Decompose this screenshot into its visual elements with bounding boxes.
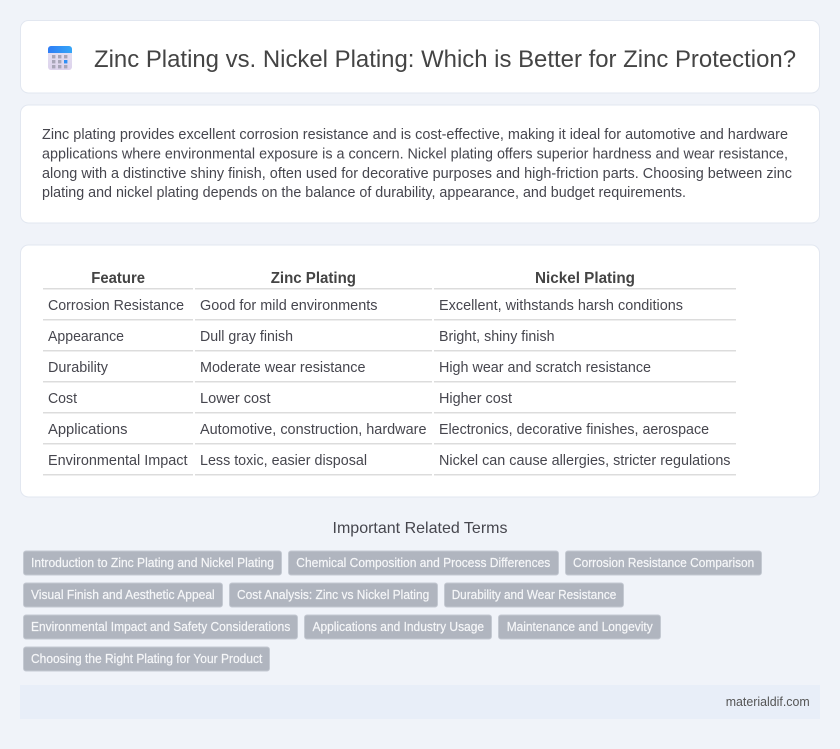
text block: summary paragraph: applications where environmental exposure is a concern. Nickel plating offers superior hardness and wear resistance, xyxy=(42,146,788,162)
tag: applications xyxy=(304,615,492,639)
table row: cost: Cost xyxy=(48,391,77,407)
text block: summary paragraph: plating and nickel plating depends on the balance of durability, appearance, and budget requirements. xyxy=(42,185,686,201)
table header: Nickel Plating xyxy=(535,270,635,287)
tag: cost analysis xyxy=(230,583,438,607)
footer bar xyxy=(20,685,820,719)
panel: comparison table card xyxy=(20,245,820,497)
table header xyxy=(43,270,736,290)
tag: maintenance xyxy=(498,615,660,639)
tag: choosing plating xyxy=(24,647,270,671)
table row: appearance: Dull gray finish xyxy=(200,329,293,345)
table row: corrosion resistance xyxy=(43,298,736,320)
text block: summary paragraph: Zinc plating provides excellent corrosion resistance and is cost-effective, making it ideal for automotive and hardware xyxy=(42,127,788,143)
heading: important related terms: Important Related Terms xyxy=(332,520,508,537)
table row: appearance: Appearance xyxy=(48,329,124,345)
table row: cost: Lower cost xyxy=(200,391,270,407)
table row: applications xyxy=(43,422,736,444)
tag: applications: Applications and Industry Usage xyxy=(312,620,484,634)
table row: durability: Moderate wear resistance xyxy=(200,360,366,376)
tag: cost analysis: Cost Analysis: Zinc vs Nickel Plating xyxy=(237,588,429,602)
tag: corrosion resistance: Corrosion Resistance Comparison xyxy=(573,556,754,570)
tag: environmental impact: Environmental Impact and Safety Considerations xyxy=(31,620,290,634)
table row: corrosion resistance: Corrosion Resistance xyxy=(48,298,184,314)
table row: durability: Durability xyxy=(48,360,109,376)
table row: applications: Automotive, construction, hardware xyxy=(200,422,426,438)
table header: Feature xyxy=(91,270,145,287)
table row: appearance xyxy=(43,329,736,352)
table row: environmental impact xyxy=(43,453,736,476)
table row: environmental impact: Nickel can cause allergies, stricter regulations xyxy=(439,453,730,469)
table row: durability xyxy=(43,360,736,382)
tag: durability: Durability and Wear Resistance xyxy=(452,588,616,602)
tag: choosing plating: Choosing the Right Plating for Your Product xyxy=(31,652,263,666)
tag: corrosion resistance xyxy=(566,551,762,575)
table row: applications: Electronics, decorative finishes, aerospace xyxy=(439,422,709,438)
table header: Zinc Plating xyxy=(271,270,356,287)
tag list: related terms xyxy=(24,551,762,671)
tag: chemical composition xyxy=(288,551,558,575)
footer source text: materialdif.com xyxy=(726,694,810,709)
tag: chemical composition: Chemical Composition and Process Differences xyxy=(296,556,550,570)
table row: corrosion resistance: Excellent, withstands harsh conditions xyxy=(439,298,683,314)
text block: summary paragraph: along with a distinctive shiny finish, often used for decorative purposes and high-friction parts. Choosing between zinc xyxy=(42,166,792,182)
panel: summary text card xyxy=(20,105,820,223)
table row: cost: Higher cost xyxy=(439,391,512,407)
table row: cost xyxy=(43,391,736,414)
table row: applications: Applications xyxy=(48,422,128,438)
tag: introduction xyxy=(24,551,282,575)
tag: durability xyxy=(444,583,624,607)
panel: title card xyxy=(20,20,820,93)
text block: summary paragraph xyxy=(42,127,792,201)
table row: corrosion resistance: Good for mild environments xyxy=(200,298,378,314)
tag: visual finish xyxy=(24,583,222,607)
table row: environmental impact: Environmental Impact xyxy=(48,453,188,469)
table row: environmental impact: Less toxic, easier disposal xyxy=(200,453,367,469)
table row: appearance: Bright, shiny finish xyxy=(439,329,554,345)
tag: visual finish: Visual Finish and Aesthetic Appeal xyxy=(31,588,215,602)
tag: introduction: Introduction to Zinc Plating and Nickel Plating xyxy=(31,556,274,570)
tag: maintenance: Maintenance and Longevity xyxy=(507,620,653,634)
icon: calendar xyxy=(48,46,72,70)
title: Zinc Plating vs. Nickel Plating: Which is Better for Zinc Protection? xyxy=(94,46,796,73)
table row: durability: High wear and scratch resistance xyxy=(439,360,651,376)
tag: environmental impact xyxy=(24,615,298,639)
